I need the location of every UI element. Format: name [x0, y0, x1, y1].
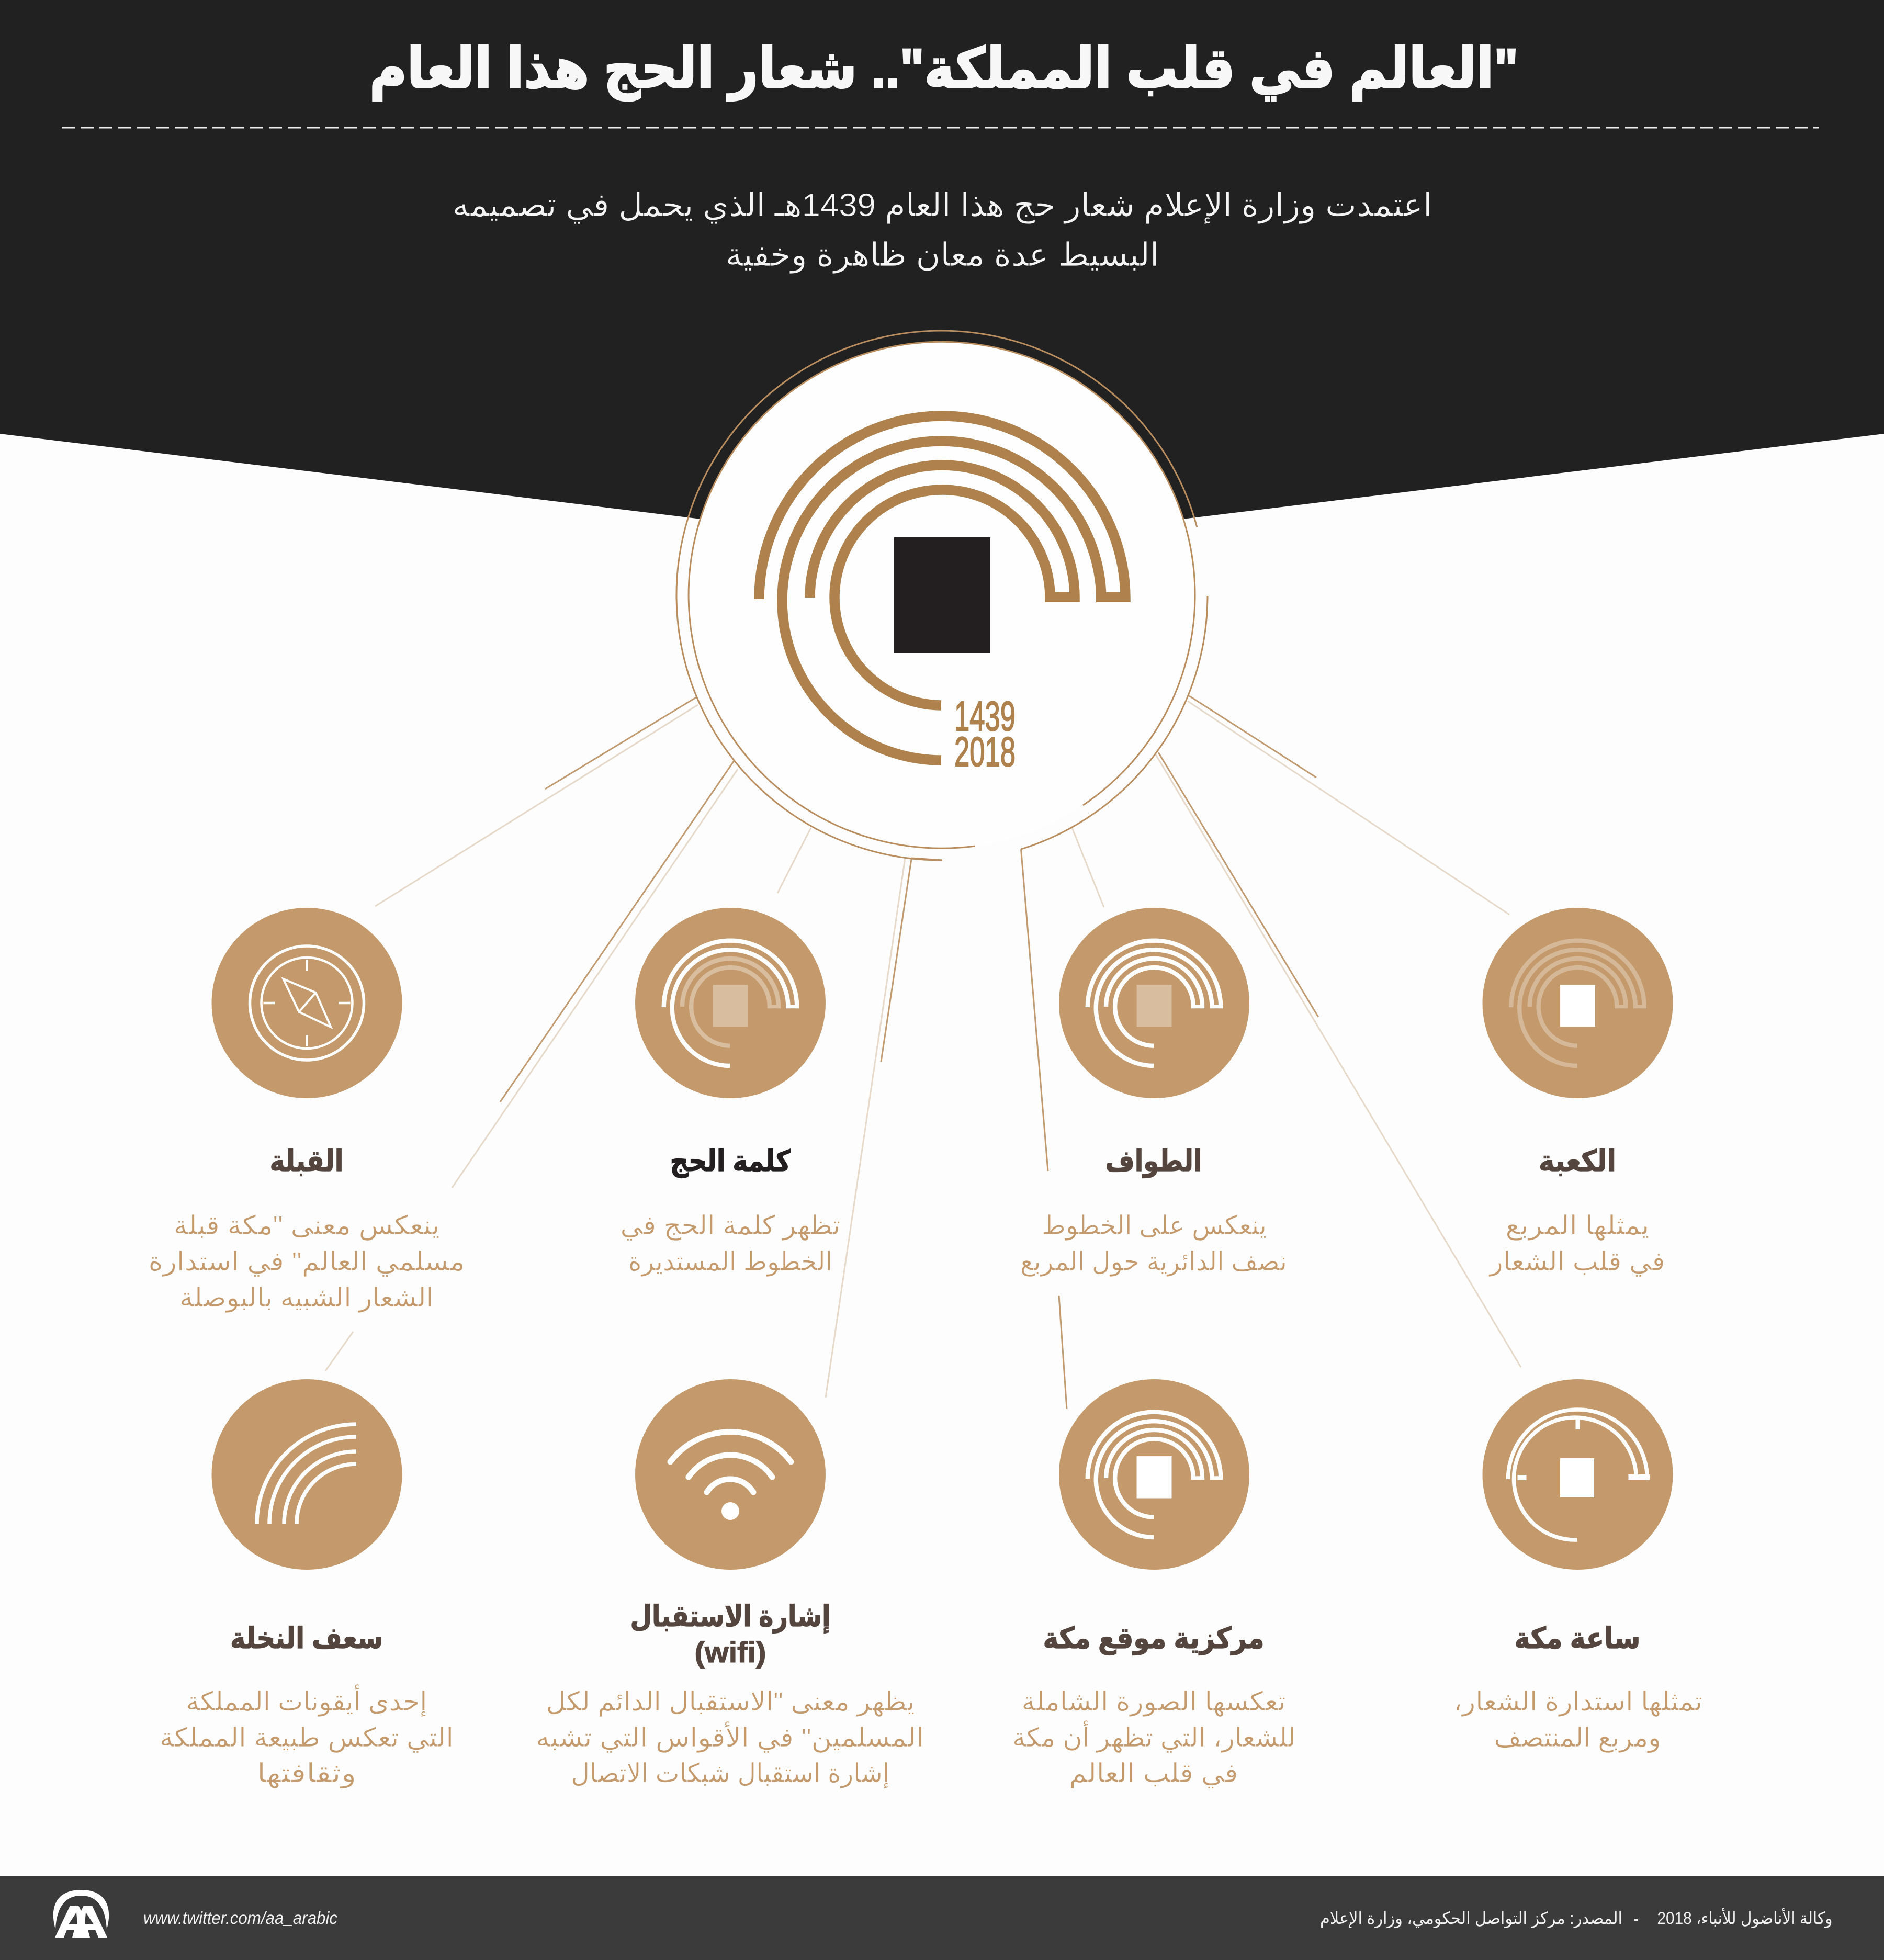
intro text [453, 187, 1432, 274]
source text [1320, 1908, 1832, 1928]
logo years [954, 693, 1016, 775]
header background [0, 0, 1884, 548]
heading: الكعبة [1539, 1144, 1616, 1177]
description: ومربع المنتصف [1494, 1723, 1661, 1753]
icon: kaaba logo [1483, 908, 1673, 1098]
description: مسلمي العالم" في استدارة [149, 1247, 465, 1277]
panel: hajj word [621, 908, 840, 1277]
description: المسلمين" في الأقواس التي تشبه [536, 1721, 924, 1753]
logo arcs [759, 416, 1130, 760]
panel: makkah centrality [1012, 1379, 1296, 1788]
description: للشعار، التي تظهر أن مكة [1012, 1720, 1296, 1753]
heading: ساعة مكة [1514, 1621, 1641, 1654]
description: يمثلها المربع [1506, 1211, 1649, 1241]
description [160, 1684, 454, 1789]
description [149, 1211, 465, 1313]
heading: القبلة [270, 1144, 343, 1177]
panel: kaaba [1483, 908, 1673, 1277]
icon: centrality logo [1059, 1379, 1249, 1570]
description [621, 1211, 840, 1277]
description: في قلب الشعار [1488, 1247, 1665, 1277]
panel: qibla [149, 908, 465, 1313]
heading [630, 1599, 831, 1669]
description: يظهر معنى "الاستقبال الدائم لكل [546, 1687, 915, 1717]
heading: إشارة الاستقبال [630, 1599, 831, 1634]
panel: wifi [536, 1379, 924, 1789]
description: التي تعكس طبيعة المملكة [160, 1723, 454, 1753]
source text: وكالة الأناضول للأنباء، 2018 [1657, 1908, 1832, 1928]
footer [0, 1876, 1884, 1960]
heading: سعف النخلة [230, 1621, 383, 1654]
description: تظهر كلمة الحج في [621, 1211, 840, 1241]
panel: tawaf [1020, 908, 1287, 1277]
heading: مركزية موقع مكة [1043, 1621, 1264, 1655]
description [1020, 1211, 1287, 1277]
heading: (wifi) [695, 1636, 766, 1669]
intro text: اعتمدت وزارة الإعلام شعار حج هذا العام 1439هـ الذي يحمل في تصميمه [453, 187, 1432, 224]
description [1453, 1687, 1702, 1753]
heading: كلمة الحج [670, 1144, 791, 1178]
icon: tawaf logo [1059, 908, 1249, 1098]
icon: AA logo [53, 1890, 109, 1938]
description [536, 1687, 924, 1789]
icon: wifi [635, 1379, 826, 1570]
icon: compass [211, 908, 402, 1098]
source text: المصدر: مركز التواصل الحكومي، وزارة الإعلام [1320, 1909, 1622, 1928]
description: تمثلها استدارة الشعار، [1453, 1687, 1702, 1717]
heading: الطواف [1105, 1144, 1202, 1178]
icon: hajj word logo [635, 908, 826, 1098]
description: إحدى أيقونات المملكة [186, 1684, 427, 1717]
panel: palm fronds [160, 1379, 454, 1789]
icon: clock [1483, 1379, 1673, 1570]
description: وثقافتها [257, 1759, 356, 1789]
connector lines [325, 696, 1521, 1409]
central emblem [676, 331, 1208, 860]
title: "العالم في قلب المملكة".. شعار الحج هذا العام [369, 38, 1518, 101]
icon: palm fronds [211, 1379, 402, 1570]
kaaba square [894, 537, 990, 653]
intro text: البسيط عدة معان ظاهرة وخفية [725, 237, 1159, 274]
logo years: 1439 [954, 693, 1016, 739]
description: ينعكس على الخطوط [1042, 1211, 1267, 1241]
logo years: 2018 [954, 728, 1016, 775]
twitter link: www.twitter.com/aa_arabic [143, 1908, 337, 1928]
description: ينعكس معنى "مكة قبلة [174, 1211, 439, 1241]
description [1012, 1687, 1296, 1788]
panel: makkah clock [1453, 1379, 1702, 1753]
description: نصف الدائرية حول المربع [1020, 1247, 1287, 1277]
description: تعكسها الصورة الشاملة [1021, 1687, 1286, 1717]
description: الشعار الشبيه بالبوصلة [179, 1283, 434, 1313]
description [1488, 1211, 1665, 1277]
description: الخطوط المستديرة [628, 1247, 832, 1277]
description: في قلب العالم [1069, 1759, 1238, 1788]
description: إشارة استقبال شبكات الاتصال [571, 1759, 889, 1789]
